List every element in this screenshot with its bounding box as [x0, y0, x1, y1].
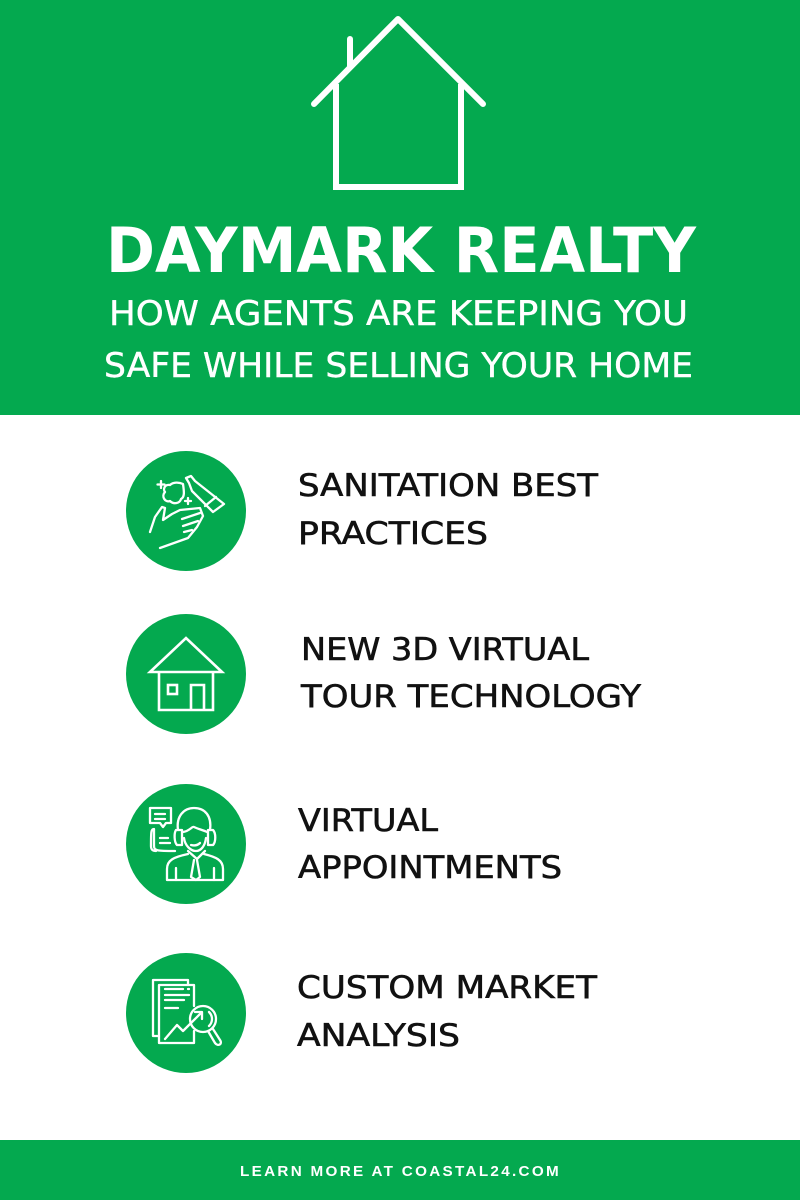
label: VIRTUAL [298, 803, 438, 839]
panel: header [0, 0, 800, 415]
label [298, 468, 599, 552]
label: TOUR TECHNOLOGY [300, 679, 642, 715]
subtitle [104, 294, 693, 386]
panel: sanitation best practices [126, 451, 599, 571]
subtitle: SAFE WHILE SELLING YOUR HOME [104, 346, 693, 386]
label [300, 632, 642, 715]
icon: agent with headset [126, 784, 246, 904]
label [298, 803, 562, 886]
label: APPOINTMENTS [298, 850, 562, 886]
panel: custom market analysis [126, 953, 598, 1073]
label: ANALYSIS [297, 1018, 460, 1054]
panel: 3d virtual tour [126, 614, 642, 734]
footer: LEARN MORE AT COASTAL24.COM [240, 1164, 561, 1180]
label: CUSTOM MARKET [297, 970, 598, 1006]
panel: virtual appointments [126, 784, 562, 904]
label: SANITATION BEST [298, 468, 599, 504]
label: PRACTICES [298, 516, 488, 552]
icon: house [126, 614, 246, 734]
icon: report with magnifier [126, 953, 246, 1073]
title: DAYMARK REALTY [106, 214, 697, 287]
icon: hand and sanitizer [126, 451, 246, 571]
label: NEW 3D VIRTUAL [301, 632, 589, 668]
label [297, 970, 598, 1054]
footer [0, 1140, 800, 1200]
icon: large house [314, 19, 483, 187]
subtitle: HOW AGENTS ARE KEEPING YOU [109, 294, 688, 334]
